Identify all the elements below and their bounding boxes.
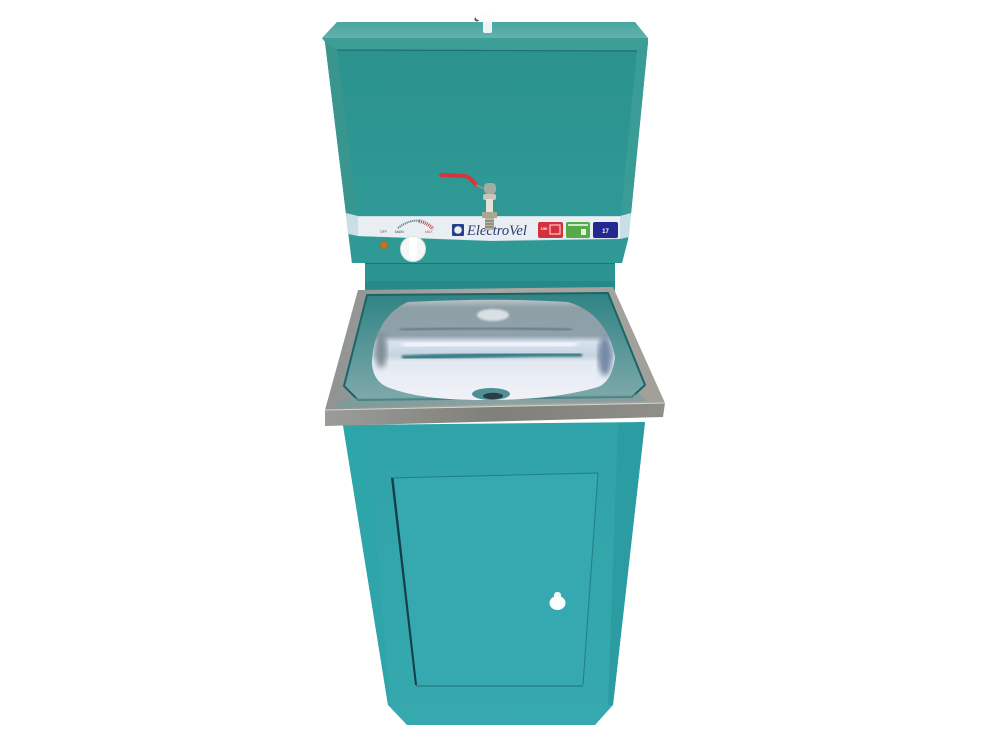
sink top [325,287,665,426]
red label: 150 [541,226,548,231]
tank lid [322,22,648,38]
red label [538,222,563,238]
blue label [593,222,618,238]
temperature dial [400,236,426,262]
brand logo: ElectroVel [466,223,527,239]
water tank [322,14,648,263]
lid knob [474,14,498,33]
temperature scale: MAIN [395,230,404,234]
blue label: 17 [602,229,609,235]
control band [346,213,631,241]
temperature scale [380,221,433,234]
sink bowl [372,300,615,400]
faucet [441,175,497,230]
indicator lamp [380,241,388,249]
drain [472,388,510,400]
cabinet door [391,473,598,686]
door knob [550,592,566,610]
back panel between tank and sink [365,262,615,294]
temperature scale: MAX [425,230,433,234]
green label [566,222,590,238]
cabinet body [343,422,645,725]
temperature scale: OFF [380,230,387,234]
